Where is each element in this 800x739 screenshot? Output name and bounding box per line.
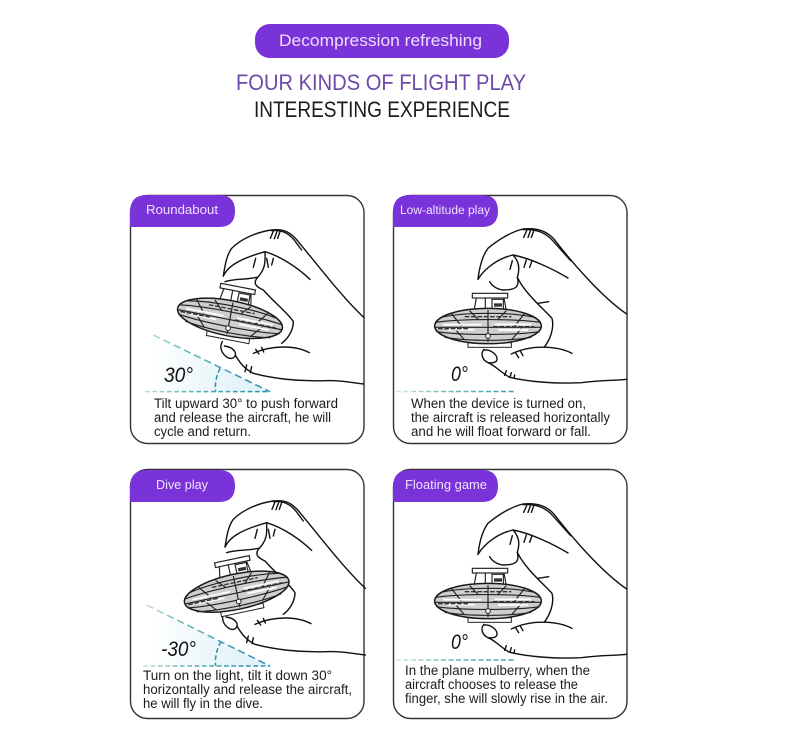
angle label: 0° xyxy=(451,363,468,386)
tab: floating game: Floating game xyxy=(405,477,487,492)
description: In the plane mulberry, when the xyxy=(405,663,590,678)
description: and release the aircraft, he will xyxy=(154,410,331,425)
description: he will fly in the dive. xyxy=(143,696,263,711)
description: finger, she will slowly rise in the air. xyxy=(405,691,608,706)
pill heading: Decompression refreshing xyxy=(279,31,482,50)
illustration: hand holding level aircraft xyxy=(435,504,627,658)
angle line xyxy=(396,390,514,392)
title: INTERESTING EXPERIENCE xyxy=(254,97,510,122)
description: Turn on the light, tilt it down 30° xyxy=(143,668,332,683)
description xyxy=(405,663,608,706)
tab: low-altitude play: Low-altitude play xyxy=(400,205,490,217)
panel: floating game xyxy=(393,470,627,718)
tab: floating game xyxy=(393,470,498,502)
description: aircraft chooses to release the xyxy=(405,677,578,692)
description: When the device is turned on, xyxy=(411,396,586,411)
description: horizontally and release the aircraft, xyxy=(143,682,352,697)
angle diagram: 30 degrees xyxy=(145,335,270,392)
description: the aircraft is released horizontally xyxy=(411,410,610,425)
panel: dive play xyxy=(130,470,365,718)
illustration: hand holding tilted aircraft xyxy=(174,230,364,384)
tab: roundabout xyxy=(130,195,235,227)
tab: low-altitude play xyxy=(393,195,498,227)
tab: dive play: Dive play xyxy=(156,477,208,492)
panel: roundabout xyxy=(130,195,364,444)
description xyxy=(411,396,610,439)
title xyxy=(236,70,526,122)
description: Tilt upward 30° to push forward xyxy=(154,396,338,411)
description xyxy=(154,396,338,439)
pill heading xyxy=(255,24,509,58)
illustration: hand holding level aircraft xyxy=(435,229,627,383)
description xyxy=(143,668,352,711)
angle line xyxy=(396,659,514,661)
tab: roundabout: Roundabout xyxy=(146,202,218,217)
panel: low-altitude play xyxy=(393,195,627,444)
angle label: 0° xyxy=(451,631,468,654)
angle diagram: minus 30 degrees xyxy=(143,605,270,666)
angle label: 30° xyxy=(164,364,193,387)
angle label: -30° xyxy=(161,638,196,661)
title: FOUR KINDS OF FLIGHT PLAY xyxy=(236,70,526,95)
illustration: hand holding downward-tilted aircraft xyxy=(178,501,365,655)
description: cycle and return. xyxy=(154,424,251,439)
tab: dive play xyxy=(130,470,235,502)
description: and he will float forward or fall. xyxy=(411,424,591,439)
